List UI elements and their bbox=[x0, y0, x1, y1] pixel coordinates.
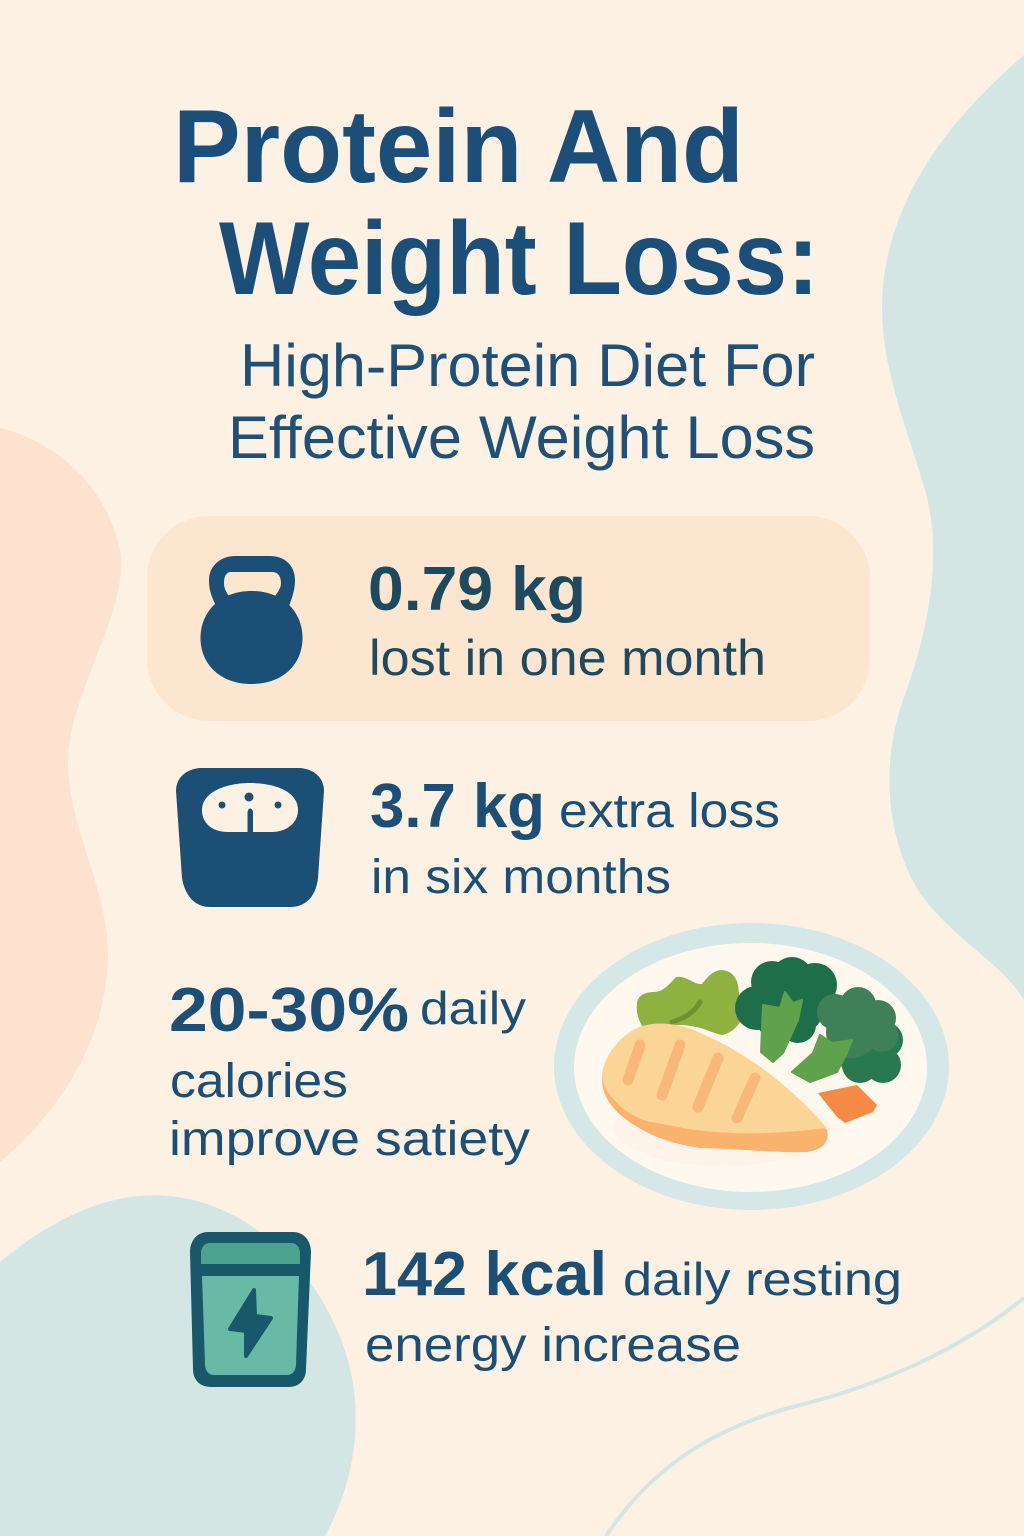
panel: 3.7 kg stat bbox=[176, 768, 780, 907]
background blob: left peach bbox=[0, 428, 121, 1162]
stat text: daily resting bbox=[623, 1253, 902, 1305]
carrot bbox=[818, 1085, 877, 1123]
icon: scale bbox=[176, 768, 324, 907]
stat text: lost in one month bbox=[369, 630, 766, 686]
stat text: in six months bbox=[371, 851, 671, 904]
panel: 142 kcal stat bbox=[190, 1232, 902, 1387]
stat text: daily bbox=[420, 982, 526, 1034]
stat text: energy increase bbox=[365, 1319, 741, 1372]
panel: 0.79 kg stat bbox=[147, 516, 870, 721]
subtitle: High-Protein Diet For bbox=[240, 332, 815, 399]
title: Weight Loss: bbox=[219, 201, 819, 317]
lettuce bbox=[637, 970, 740, 1035]
background blob: bottom-left teal bbox=[0, 1195, 356, 1536]
stat text: calories bbox=[170, 1055, 348, 1108]
background blob: right teal bbox=[882, 55, 1024, 1000]
icon: plate with chicken and broccoli bbox=[554, 923, 949, 1210]
stat text: 0.79 kg bbox=[368, 555, 586, 624]
stat text bbox=[362, 1240, 902, 1372]
stat text bbox=[368, 555, 766, 686]
stat text: 20-30% bbox=[169, 976, 409, 1045]
subtitle bbox=[228, 332, 815, 471]
icon: kettlebell bbox=[200, 556, 302, 684]
stat text bbox=[370, 772, 780, 904]
stat text: 142 kcal bbox=[362, 1240, 607, 1309]
stat text bbox=[169, 976, 530, 1166]
subtitle: Effective Weight Loss bbox=[228, 404, 815, 471]
title bbox=[173, 89, 819, 317]
stat text: extra loss bbox=[559, 785, 780, 838]
stat text: 3.7 kg bbox=[370, 772, 545, 841]
decorative curve line bbox=[606, 1298, 1024, 1536]
chicken bbox=[602, 1024, 828, 1152]
stat text: improve satiety bbox=[169, 1113, 530, 1166]
broccoli bbox=[735, 957, 903, 1083]
title: Protein And bbox=[173, 89, 744, 205]
icon: supplement jar bbox=[190, 1232, 311, 1387]
panel: 20-30% stat bbox=[169, 923, 949, 1210]
